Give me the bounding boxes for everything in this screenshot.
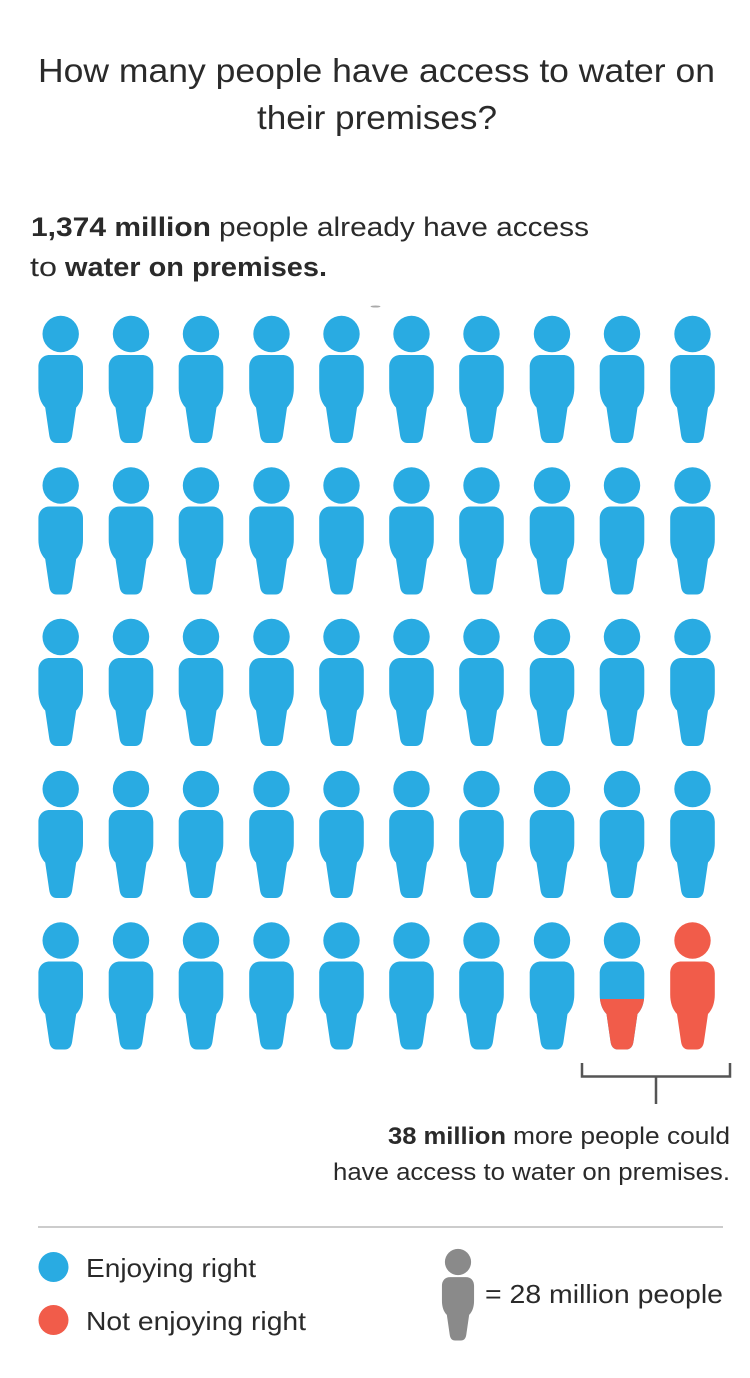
legend: not enjoying right: Not enjoying right (86, 1306, 307, 1336)
icon: partly red person (600, 999, 644, 1050)
text block: people with access: 1,374 million (31, 212, 211, 242)
title (38, 52, 715, 136)
callout: 38 million more people: more people could (513, 1123, 730, 1150)
legend: person scale (442, 1249, 723, 1340)
legend: enjoying right (38, 1252, 257, 1283)
text block: people with access: to (30, 252, 57, 282)
text block: people with access (30, 212, 589, 282)
title: How many people have access to water on (38, 52, 715, 89)
title: their premises? (257, 99, 497, 136)
legend: enjoying right: Enjoying right (86, 1253, 257, 1283)
pictogram: 50 people (38, 316, 715, 1050)
callout: 38 million more people: 38 million (388, 1123, 506, 1150)
text block: people with access: water on premises. (64, 252, 327, 282)
bracket (582, 1063, 730, 1104)
callout: 38 million more people: have access to water on premises. (333, 1159, 730, 1186)
icon: red person (670, 922, 715, 1050)
text block: people with access: people already have access (219, 212, 589, 242)
legend: person scale: = 28 million people (485, 1279, 723, 1309)
callout: 38 million more people (333, 1123, 730, 1186)
